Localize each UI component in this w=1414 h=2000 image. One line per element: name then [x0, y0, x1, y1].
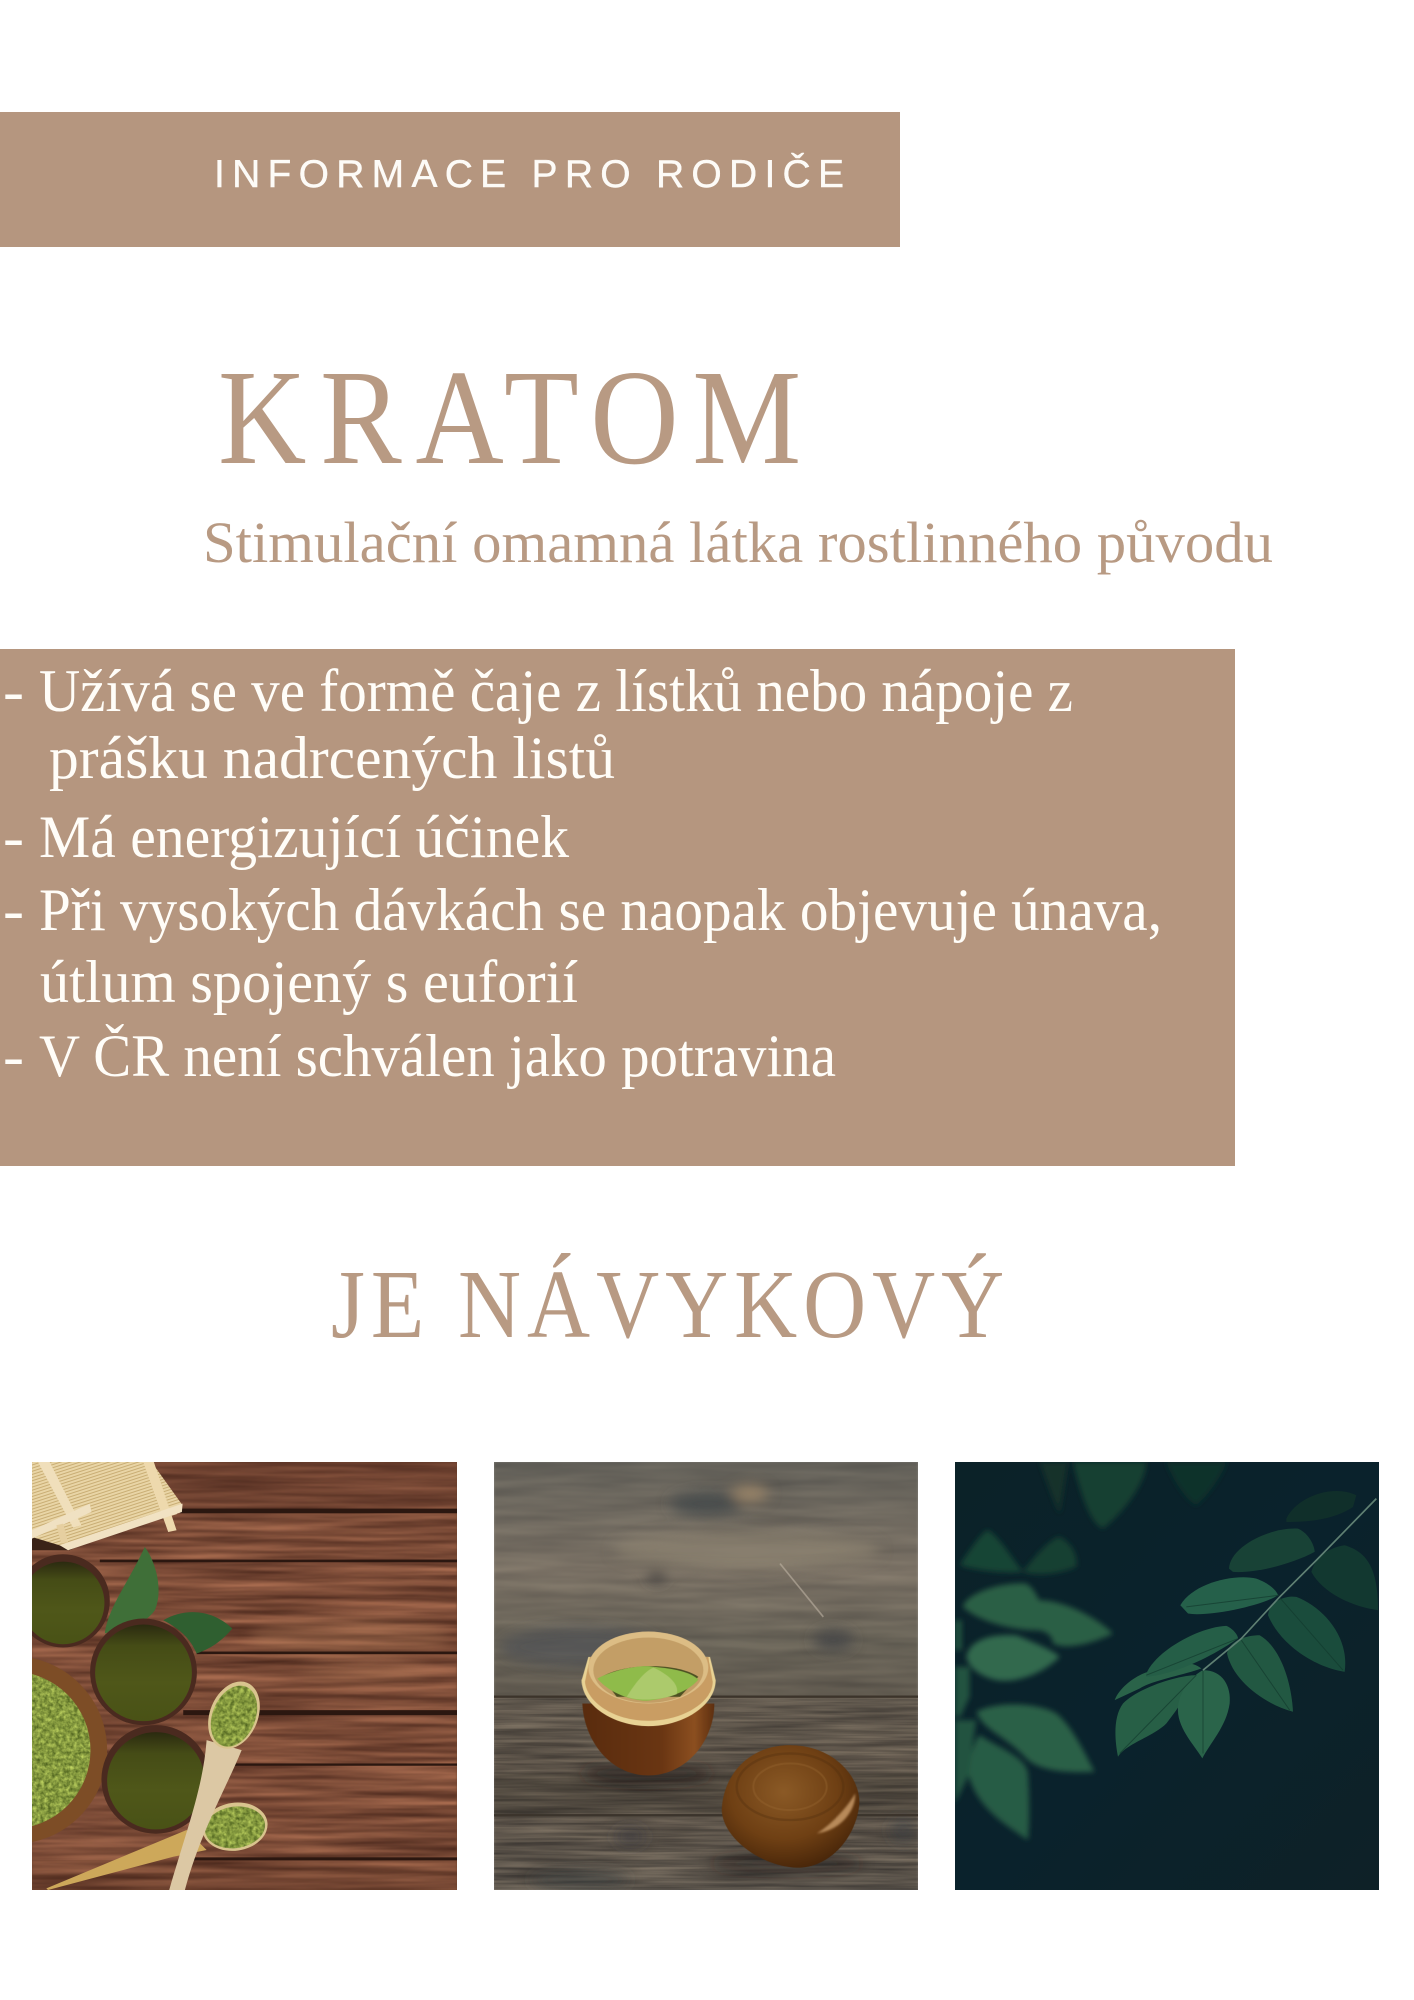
bowl of powder [0, 1656, 107, 1844]
photo: matcha cups on wooden table [32, 1462, 457, 1890]
spoons with powder [46, 1674, 271, 1890]
photo: green leaves on a dark background [955, 1462, 1379, 1890]
header banner [0, 112, 900, 247]
tea cups [16, 1554, 210, 1834]
fact: form of use: Užívá se ve formě čaje z lístků nebo nápoje z [39, 658, 1073, 724]
fact: high doses: Při vysokých dávkách se naopak objevuje únava, [39, 877, 1162, 943]
fact: form of use: prášku nadrcených listů [49, 725, 615, 791]
lid [722, 1745, 859, 1868]
fact: energizing effect: - [3, 804, 24, 870]
banner label: INFORMACE PRO RODIČE [214, 152, 844, 196]
blurred background leaves [955, 1462, 1226, 1840]
heading: addictive: JE NÁVYKOVÝ [331, 1251, 1004, 1358]
fact: high doses [3, 877, 1162, 1015]
panel: facts about kratom [0, 649, 1235, 1166]
title: KRATOM [218, 342, 801, 492]
fact: energizing effect: Má energizující účinek [39, 804, 569, 870]
fact: form of use [3, 658, 1073, 791]
fact: legal status: - [3, 1023, 24, 1089]
subtitle: Stimulační omamná látka rostlinného původu [203, 510, 1273, 575]
fact: form of use: - [3, 658, 24, 724]
green powder [597, 1666, 698, 1701]
bamboo mat [32, 1462, 183, 1550]
branch with sharp leaves [1115, 1491, 1378, 1758]
pot [582, 1632, 716, 1775]
fact: legal status: V ČR není schválen jako potravina [39, 1023, 836, 1089]
leaves [105, 1547, 232, 1654]
fact: high doses: útlum spojený s euforií [40, 949, 578, 1015]
fact: high doses: - [3, 877, 24, 943]
photo: wooden pot with green powder [494, 1462, 918, 1890]
